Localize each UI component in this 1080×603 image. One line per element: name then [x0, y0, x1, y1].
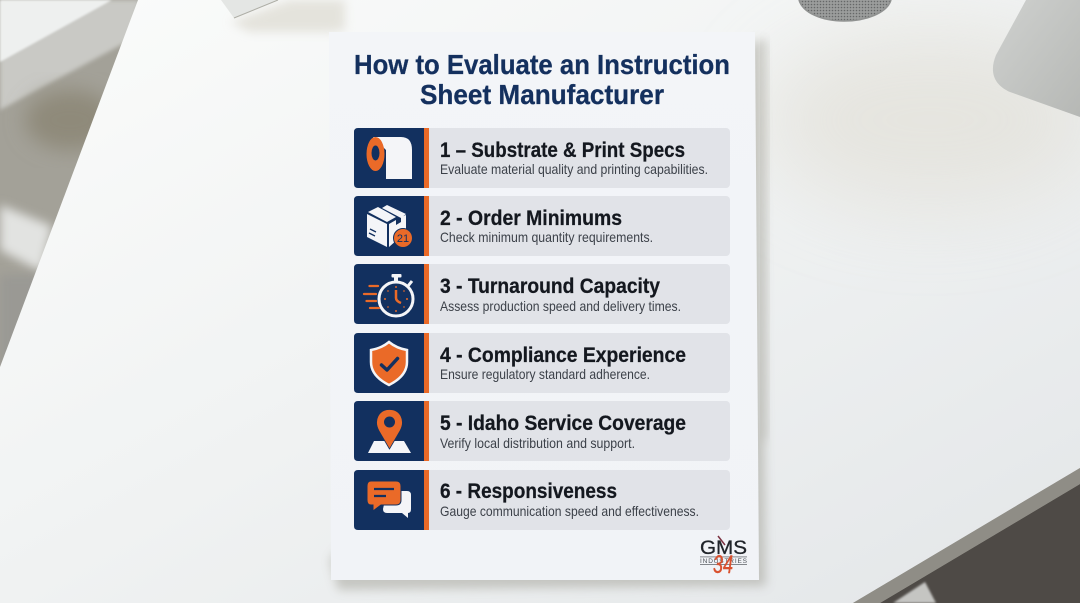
box corner on desk — [221, 0, 345, 32]
paper sheet — [329, 32, 759, 580]
paper shadow — [330, 40, 766, 590]
row 3: turnaround capacity — [354, 264, 730, 324]
speaker on desk — [799, 0, 891, 21]
description 5: Verify local distribution and support. — [440, 435, 635, 451]
desk front edge — [853, 468, 1080, 603]
icon: paper roll — [366, 137, 412, 179]
instruction sheet panel — [329, 32, 759, 580]
logo: GMS Industries 34: INDUSTRIES — [700, 558, 748, 565]
title: Sheet Manufacturer — [420, 79, 664, 110]
icon: box with badge: 21 — [397, 233, 409, 245]
heading 5: 5 - Idaho Service Coverage — [440, 412, 686, 435]
row 4: compliance experience — [354, 333, 730, 393]
title — [354, 49, 730, 110]
icon: shield with check — [371, 342, 407, 385]
row 6: responsiveness — [354, 470, 730, 530]
title: How to Evaluate an Instruction — [354, 49, 730, 80]
logo: GMS Industries 34: 34 — [713, 551, 733, 579]
heading 1: 1 – Substrate & Print Specs — [440, 139, 685, 162]
icon: map pin — [368, 410, 411, 453]
description 2: Check minimum quantity requirements. — [440, 229, 653, 245]
heading 3: 3 - Turnaround Capacity — [440, 275, 660, 298]
description 6: Gauge communication speed and effectiveness. — [440, 503, 699, 519]
icon: stopwatch — [364, 274, 413, 316]
icon: box with badge — [367, 205, 412, 248]
description 4: Ensure regulatory standard adherence. — [440, 366, 650, 382]
logo: GMS Industries 34: GMS — [700, 538, 747, 559]
row 1: substrate and print specs — [354, 128, 730, 188]
row 2: order minimums — [354, 196, 730, 256]
description 1: Evaluate material quality and printing capabilities. — [440, 161, 708, 177]
heading 2: 2 - Order Minimums — [440, 207, 622, 230]
row 5: idaho service coverage — [354, 401, 730, 461]
desk shading — [760, 30, 1080, 440]
logo: GMS Industries 34 — [700, 536, 748, 579]
monitor stand — [993, 0, 1080, 117]
icon: chat bubbles — [367, 481, 411, 518]
description 3: Assess production speed and delivery times. — [440, 298, 681, 314]
heading 4: 4 - Compliance Experience — [440, 344, 686, 367]
heading 6: 6 - Responsiveness — [440, 480, 617, 503]
